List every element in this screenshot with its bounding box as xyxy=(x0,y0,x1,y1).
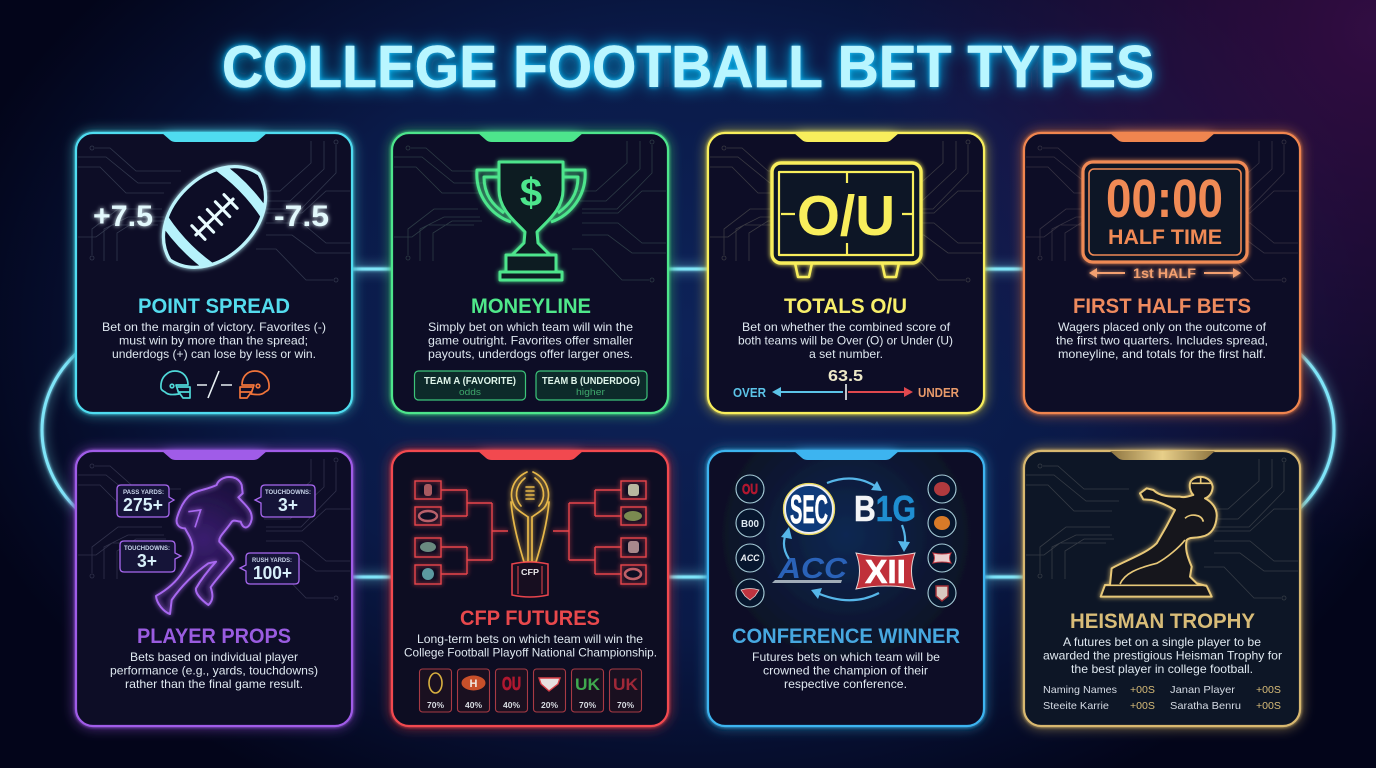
team odds row: 70% xyxy=(427,700,444,710)
odds table: Steeite Karrie xyxy=(1043,700,1109,712)
panel: first half bets xyxy=(1024,133,1300,413)
odds: plus: +7.5 xyxy=(93,200,153,233)
icon: trophy: $ xyxy=(520,171,542,215)
connector lines xyxy=(42,269,1334,577)
first half span arrow xyxy=(1089,265,1241,281)
team B box: higher xyxy=(576,387,605,397)
description: respective conference. xyxy=(784,677,907,691)
icon: scoreboard: O/U xyxy=(797,184,895,248)
description: a set number. xyxy=(809,347,883,361)
team logos left xyxy=(736,475,764,607)
description: must win by more than the spread; xyxy=(119,334,308,348)
logo: ACC: ACC xyxy=(777,553,848,585)
odds table: Janan Player xyxy=(1170,684,1236,696)
team odds row: 20% xyxy=(541,700,558,710)
callout: touchdowns right xyxy=(255,485,315,517)
description: Bet on the margin of victory. Favorites (-) xyxy=(102,320,326,334)
description: A futures bet on a single player to be xyxy=(1063,635,1261,649)
description xyxy=(404,632,657,660)
description xyxy=(738,320,953,361)
icon: runner silhouette xyxy=(156,477,252,614)
description: Wagers placed only on the outcome of xyxy=(1058,320,1267,334)
logo: B1G: B1G xyxy=(854,488,916,529)
heading: FIRST HALF BETS xyxy=(1073,295,1251,318)
over under line: 63.5 xyxy=(828,368,863,385)
cycle arrows xyxy=(781,479,910,600)
odds table: +00S xyxy=(1130,684,1155,696)
panel: moneyline xyxy=(392,133,668,413)
odds table xyxy=(1043,684,1281,712)
icon: half time clock xyxy=(1083,162,1247,262)
description: the best player in college football. xyxy=(1071,662,1253,676)
description xyxy=(752,650,940,691)
callout: rush yards: RUSH YARDS: xyxy=(252,557,292,564)
heading: POINT SPREAD xyxy=(138,295,290,318)
panel: player props xyxy=(76,451,352,726)
heading: TOTALS O/U xyxy=(784,295,907,318)
callout: touchdowns left: 3+ xyxy=(137,551,157,571)
description: underdogs (+) can lose by less or win. xyxy=(112,347,316,361)
title: COLLEGE FOOTBALL BET TYPES xyxy=(222,34,1154,100)
heading: MONEYLINE xyxy=(471,295,591,318)
description xyxy=(102,320,326,361)
logo: SEC: SEC xyxy=(790,488,828,532)
team odds row: 70% xyxy=(579,700,596,710)
team odds row: 70% xyxy=(617,700,634,710)
panel: cfp futures xyxy=(392,451,668,726)
description: game outright. Favorites offer smaller xyxy=(428,334,633,348)
callout: pass yards: 275+ xyxy=(123,495,163,515)
icon: cfp trophy: CFP xyxy=(521,568,540,577)
team odds row: H xyxy=(470,678,478,690)
team A box xyxy=(414,371,526,400)
icon: scoreboard xyxy=(772,163,921,277)
icon: helmets versus xyxy=(161,371,269,398)
team odds row xyxy=(420,669,642,712)
bracket xyxy=(415,481,646,584)
callout: touchdowns left: TOUCHDOWNS: xyxy=(124,545,170,552)
description: Bet on whether the combined score of xyxy=(742,320,951,334)
logo: big 12 xyxy=(856,553,915,590)
callout: touchdowns right: TOUCHDOWNS: xyxy=(265,489,311,496)
icon: cfp trophy xyxy=(511,472,549,597)
icon: trophy xyxy=(477,162,585,280)
team logos left: OU xyxy=(742,481,758,498)
description: the first two quarters. Includes spread, xyxy=(1056,334,1268,348)
team B box: TEAM B (UNDERDOG) xyxy=(542,376,640,387)
description: Futures bets on which team will be xyxy=(752,650,940,664)
team odds row: UK xyxy=(575,675,601,694)
logo: big 12: XII xyxy=(865,553,906,590)
description: performance (e.g., yards, touchdowns) xyxy=(110,664,318,678)
odds table: +00S xyxy=(1256,700,1281,712)
description: Bets based on individual player xyxy=(130,650,298,664)
team logos left: B00 xyxy=(741,519,759,530)
description xyxy=(428,320,633,361)
description xyxy=(1043,635,1282,676)
description xyxy=(110,650,318,691)
team odds row: 40% xyxy=(503,700,520,710)
description: College Football Playoff National Championship. xyxy=(404,646,657,660)
panel: heisman trophy xyxy=(1024,451,1300,726)
icon: football xyxy=(158,161,271,273)
icon: half time clock: 00:00 xyxy=(1106,169,1223,229)
odds table: +00S xyxy=(1256,684,1281,696)
description: payouts, underdogs offer larger ones. xyxy=(428,347,633,361)
team logos left: ACC xyxy=(740,553,760,563)
odds table: +00S xyxy=(1130,700,1155,712)
description: crowned the champion of their xyxy=(763,664,928,678)
description: Simply bet on which team will win the xyxy=(428,320,633,334)
description: Long-term bets on which team will win the xyxy=(417,632,643,646)
description: rather than the final game result. xyxy=(125,677,303,691)
team A box: odds xyxy=(459,387,482,397)
panel: point spread xyxy=(76,133,352,413)
first half span arrow: 1st HALF xyxy=(1133,265,1196,281)
odds: minus: -7.5 xyxy=(274,200,329,233)
heading: PLAYER PROPS xyxy=(137,625,291,648)
panel: conference winner xyxy=(708,451,984,726)
team odds row: UK xyxy=(613,675,639,694)
callout: touchdowns left xyxy=(120,541,181,572)
callout: rush yards xyxy=(240,553,299,584)
heading: CFP FUTURES xyxy=(460,607,600,630)
panel: totals over under xyxy=(708,133,984,413)
callout: pass yards xyxy=(117,485,174,517)
callout: pass yards: PASS YARDS: xyxy=(123,489,164,496)
over under line: OVER xyxy=(733,385,767,400)
logo: SEC xyxy=(784,484,834,534)
callout: touchdowns right: 3+ xyxy=(278,495,298,515)
team logos right xyxy=(928,475,956,607)
icon: half time clock: HALF TIME xyxy=(1108,226,1222,249)
over under line xyxy=(733,368,960,400)
team odds row: OU xyxy=(502,674,521,694)
team A box: TEAM A (FAVORITE) xyxy=(424,376,516,387)
description xyxy=(1056,320,1268,361)
description: moneyline, and totals for the first half. xyxy=(1058,347,1266,361)
description: awarded the prestigious Heisman Trophy for xyxy=(1043,648,1282,662)
heading: CONFERENCE WINNER xyxy=(732,625,960,648)
over under line: UNDER xyxy=(918,385,960,400)
callout: rush yards: 100+ xyxy=(253,563,292,583)
odds table: Saratha Benru xyxy=(1170,700,1241,712)
description: both teams will be Over (O) or Under (U) xyxy=(738,334,953,348)
icon: heisman statue xyxy=(1101,476,1217,597)
heading: HEISMAN TROPHY xyxy=(1070,610,1255,633)
team odds row: 40% xyxy=(465,700,482,710)
team B box xyxy=(536,371,647,400)
odds table: Naming Names xyxy=(1043,684,1117,696)
